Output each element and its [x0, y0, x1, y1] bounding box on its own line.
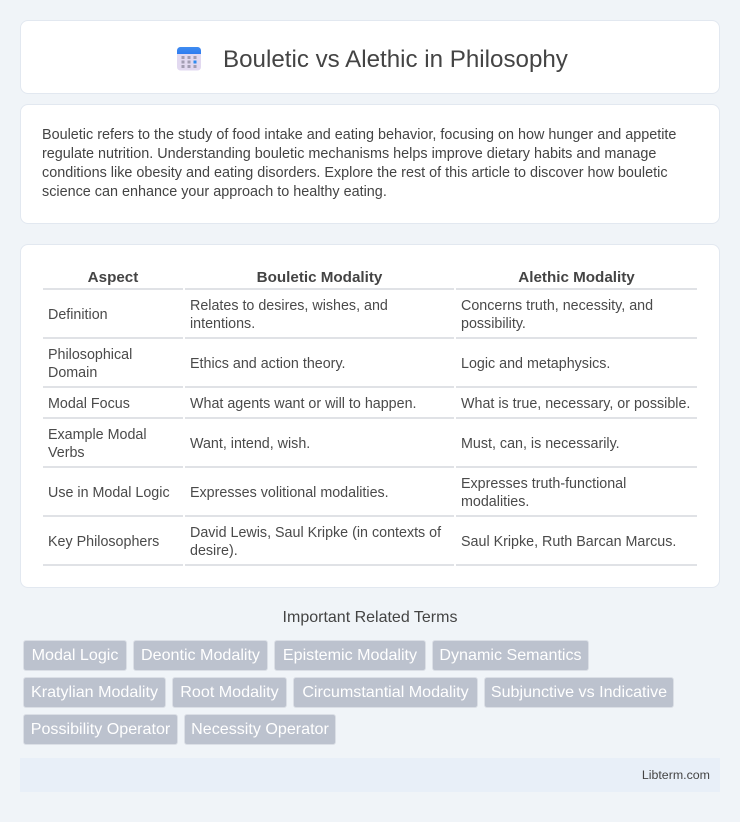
intro text: regulate nutrition. Understanding bouletic mechanisms helps improve dietary habits and manage: [42, 146, 656, 162]
intro panel: [20, 104, 720, 224]
header card: [20, 20, 720, 94]
tag: Root Modality: [172, 677, 287, 708]
tag: Deontic Modality: Deontic Modality: [141, 646, 260, 664]
row: use in modal logic: modalities.: [461, 494, 529, 510]
related terms tags: [23, 640, 674, 745]
tag: Subjunctive vs Indicative: [484, 677, 674, 708]
tag: Dynamic Semantics: Dynamic Semantics: [439, 646, 582, 664]
row: key philosophers: David Lewis, Saul Kripke (in contexts of: [190, 525, 441, 541]
intro text: science can enhance your approach to healthy eating.: [42, 184, 387, 200]
row: modal focus: What is true, necessary, or possible.: [461, 396, 690, 412]
intro text: Bouletic refers to the study of food intake and eating behavior, focusing on how hunger and appetite: [42, 127, 676, 143]
tag: Modal Logic: Modal Logic: [32, 646, 118, 664]
row: example modal verbs: Verbs: [48, 445, 85, 461]
tag: Deontic Modality: [133, 640, 268, 671]
row: example modal verbs: Example Modal: [48, 427, 147, 443]
footer credit: Libterm.com: [642, 768, 710, 782]
row: philosophical domain: Philosophical: [48, 347, 132, 363]
row: use in modal logic: Expresses truth-functional: [461, 476, 626, 492]
tag: Dynamic Semantics: [432, 640, 589, 671]
row: example modal verbs: [48, 427, 620, 461]
row: key philosophers: desire).: [190, 543, 238, 559]
row: definition: possibility.: [461, 316, 526, 332]
intro text: conditions like obesity and eating disorders. Explore the rest of this article to discover how bouletic: [42, 165, 668, 181]
row: key philosophers: [48, 525, 676, 559]
row: example modal verbs: Want, intend, wish.: [190, 436, 310, 452]
table header: Bouletic Modality: [257, 269, 382, 286]
tag: Modal Logic: [23, 640, 127, 671]
row: key philosophers: Key Philosophers: [48, 534, 159, 550]
tag: Possibility Operator: [23, 714, 178, 745]
row: use in modal logic: Use in Modal Logic: [48, 485, 170, 501]
tag: Necessity Operator: [184, 714, 336, 745]
table header: Alethic Modality: [518, 269, 635, 286]
row: definition: [48, 298, 653, 332]
row: philosophical domain: Logic and metaphysics.: [461, 356, 610, 372]
tag: Subjunctive vs Indicative: Subjunctive vs Indicative: [491, 683, 667, 701]
table header: [88, 269, 635, 286]
row: definition: intentions.: [190, 316, 255, 332]
footer bar: [20, 758, 720, 792]
row: example modal verbs: Must, can, is necessarily.: [461, 436, 620, 452]
related terms heading: Important Related Terms: [283, 609, 457, 626]
row: use in modal logic: Expresses volitional modalities.: [190, 485, 389, 501]
row: modal focus: [48, 396, 690, 412]
tag: Epistemic Modality: [274, 640, 426, 671]
tag: Necessity Operator: Necessity Operator: [191, 720, 329, 738]
comparison table: [43, 269, 697, 566]
tag: Epistemic Modality: Epistemic Modality: [283, 646, 417, 664]
row: definition: Concerns truth, necessity, and: [461, 298, 653, 314]
tag: Kratylian Modality: [23, 677, 166, 708]
tag: Circumstantial Modality: [293, 677, 478, 708]
icon: calendar: [177, 47, 201, 70]
row: modal focus: Modal Focus: [48, 396, 130, 412]
tag: Possibility Operator: Possibility Operator: [31, 720, 170, 738]
row: philosophical domain: [48, 347, 610, 381]
row: definition: Relates to desires, wishes, and: [190, 298, 388, 314]
intro text: [42, 127, 676, 200]
tag: Kratylian Modality: Kratylian Modality: [31, 683, 158, 701]
tag: Root Modality: Root Modality: [180, 683, 279, 701]
tag: Circumstantial Modality: Circumstantial Modality: [302, 683, 469, 701]
comparison table panel: [20, 244, 720, 588]
row: definition: Definition: [48, 307, 108, 323]
row: use in modal logic: [48, 476, 626, 510]
table header: Aspect: [88, 269, 138, 286]
row: modal focus: What agents want or will to happen.: [190, 396, 416, 412]
title: Bouletic vs Alethic in Philosophy: [223, 46, 568, 72]
row: philosophical domain: Ethics and action theory.: [190, 356, 346, 372]
row: key philosophers: Saul Kripke, Ruth Barcan Marcus.: [461, 534, 676, 550]
row: philosophical domain: Domain: [48, 365, 97, 381]
